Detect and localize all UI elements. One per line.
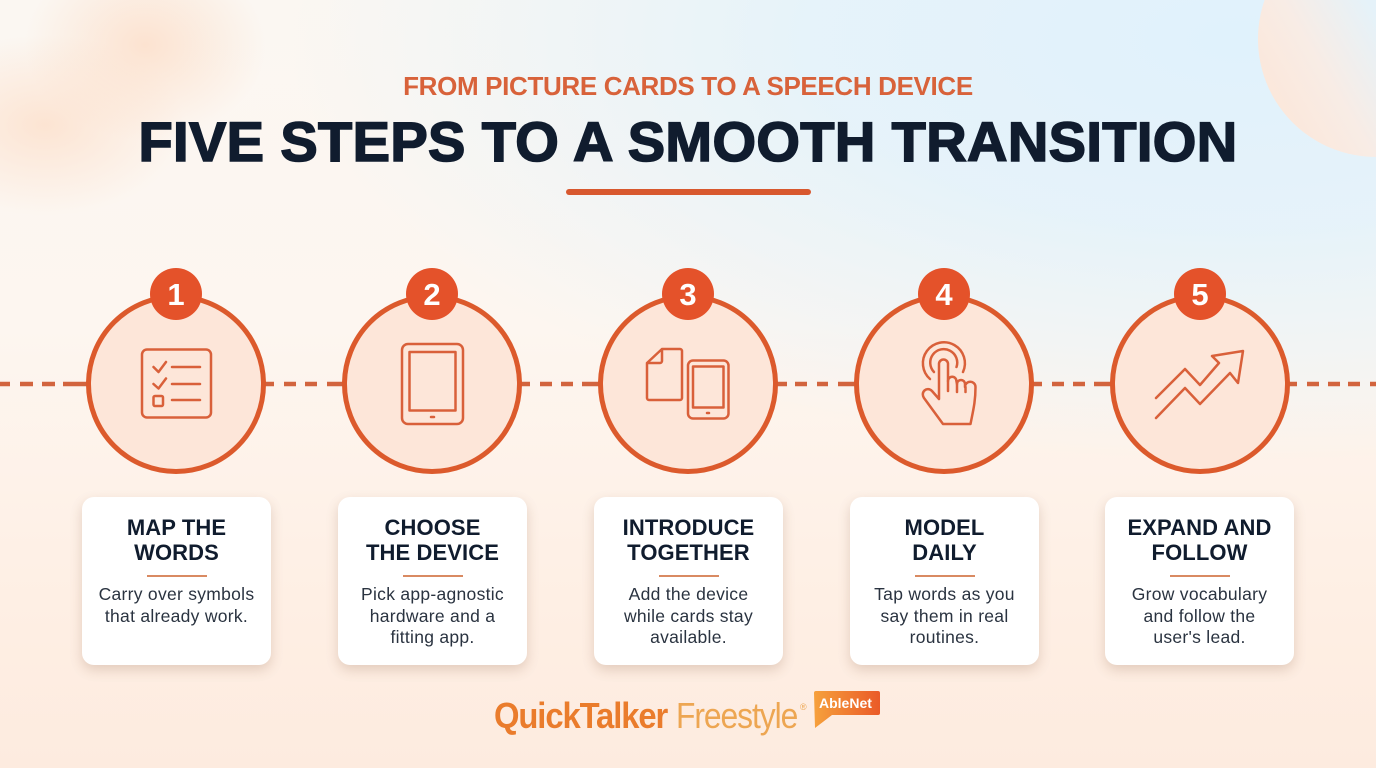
card 1: Carry over symbols [99,584,254,604]
card 4: routines. [910,627,979,647]
step 1 circle and icon [88,268,264,472]
card 3: Add the device [629,584,748,604]
step 4 circle and icon: 4 [935,277,953,312]
card 2: CHOOSE [385,515,480,540]
title underline [566,189,811,195]
card 4: Tap words as you [874,584,1015,604]
card 5: user's lead. [1153,627,1246,647]
card 5 [1105,497,1294,665]
step 2 circle and icon [344,268,520,472]
eyebrow heading: FROM PICTURE CARDS TO A SPEECH DEVICE [403,70,973,100]
logo: AbleNet badge [814,691,880,728]
card 5: Grow vocabulary [1132,584,1267,604]
card 3 [594,497,783,665]
card 4: MODEL [905,515,984,540]
logo: QuickTalker Freestyle: ® [800,702,807,712]
logo: QuickTalker Freestyle: QuickTalker [494,695,667,736]
card 5: EXPAND AND [1127,515,1272,540]
step 4 circle and icon [856,268,1032,472]
main title: FIVE STEPS TO A SMOOTH TRANSITION [138,110,1238,172]
logo: AbleNet badge: AbleNet [819,695,872,711]
step 3 circle and icon [600,268,776,472]
card 5: and follow the [1144,606,1255,626]
card 3: available. [650,627,727,647]
card 3: INTRODUCE [623,515,754,540]
card 5: FOLLOW [1152,540,1247,565]
step circles and icons [86,268,1290,474]
card 1: WORDS [134,540,219,565]
logo: QuickTalker Freestyle: Freestyle [676,695,797,736]
decorative corner circle [1258,0,1376,157]
dashed timeline [0,382,1376,386]
card 4 [850,497,1039,665]
card 4: DAILY [912,540,977,565]
step 2 circle and icon: 2 [423,277,441,312]
card 2: fitting app. [390,627,475,647]
card 2 [338,497,527,665]
card 1: MAP THE [127,515,226,540]
step 3 circle and icon: 3 [679,277,697,312]
step 5 circle and icon: 5 [1191,277,1209,312]
card 1 [82,497,271,665]
card 2: hardware and a [370,606,495,626]
card 3: TOGETHER [627,540,750,565]
step 1 circle and icon: 1 [167,277,185,312]
card 2: THE DEVICE [366,540,499,565]
step 5 circle and icon [1112,268,1288,472]
card 1: that already work. [105,606,248,626]
card 4: say them in real [880,606,1008,626]
card 3: while cards stay [624,606,753,626]
logo: QuickTalker Freestyle [494,695,807,736]
card 2: Pick app-agnostic [361,584,504,604]
